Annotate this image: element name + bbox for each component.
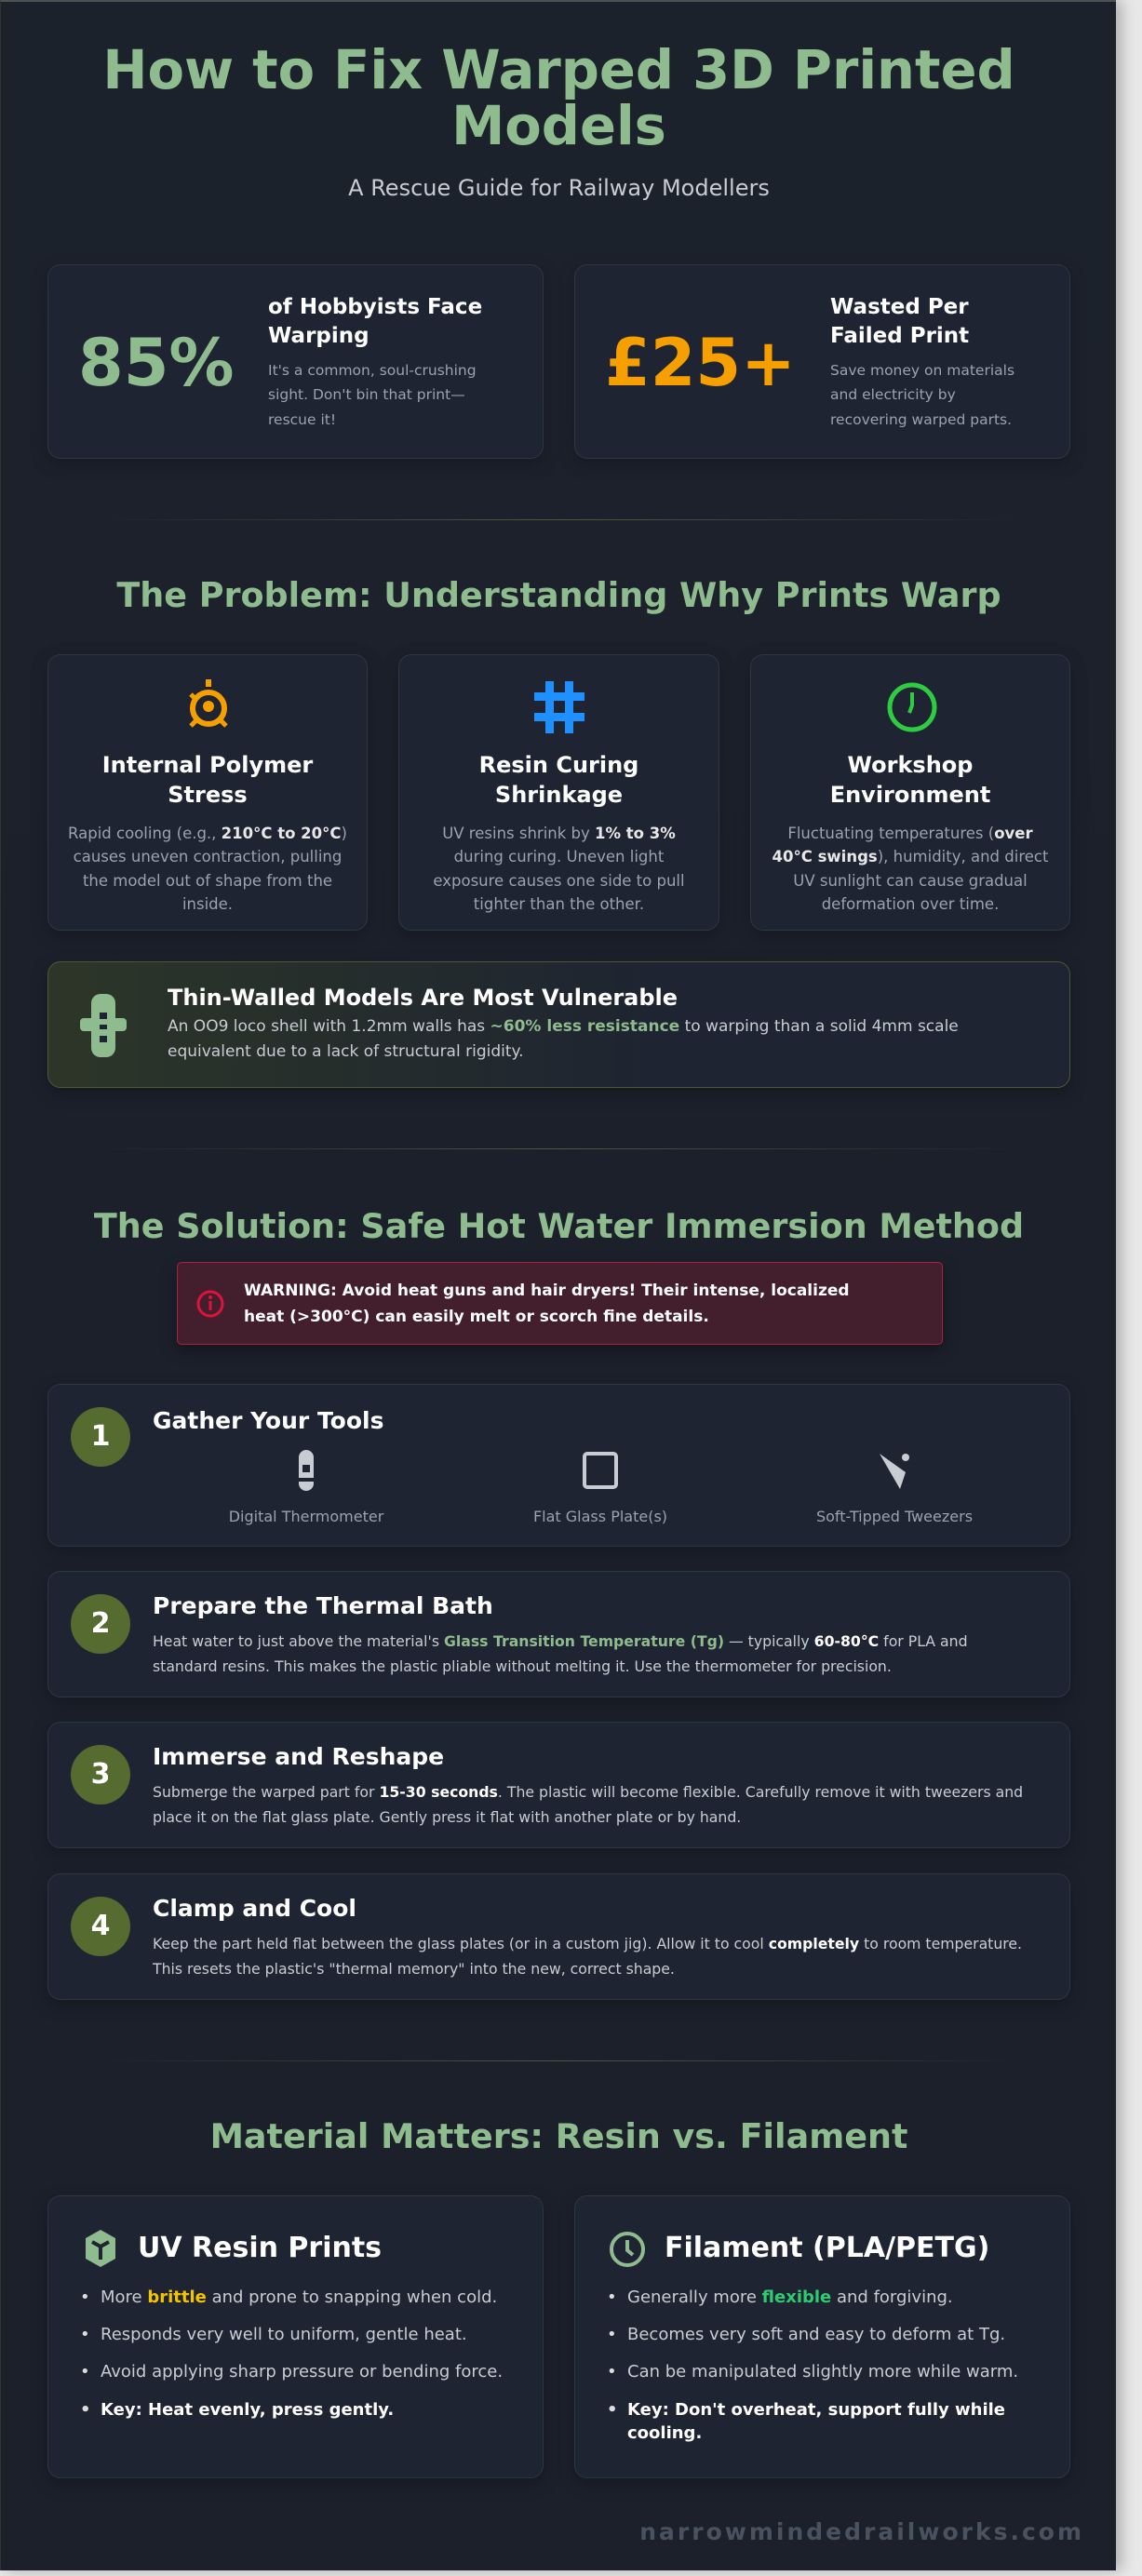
tool: glass plate [533, 1452, 667, 1525]
panel: resin shrinkage [398, 654, 719, 931]
icon: loco shell [80, 994, 127, 1057]
panel: workshop environment: Workshop Environment [830, 752, 990, 808]
panel: workshop environment: Fluctuating temperatures (over [787, 825, 1033, 842]
panel: UV resin: UV Resin Prints [138, 2232, 382, 2264]
stat card: 85% [47, 264, 544, 459]
panel: workshop environment [750, 654, 1070, 931]
icon: stress [189, 679, 228, 728]
step 4: This resets the plastic's "thermal memory" into the new, correct shape. [153, 1960, 675, 1978]
subtitle: A Rescue Guide for Railway Modellers [348, 175, 770, 201]
panel: polymer stress: Internal Polymer Stress [102, 752, 313, 808]
step 2: standard resins. This makes the plastic pliable without melting it. Use the thermometer for precision. [153, 1657, 892, 1675]
panel: polymer stress: Rapid cooling (e.g., 210°C to 20°C) causes uneven contraction, pulling the model out of shape from the inside. [68, 825, 347, 913]
stat number: £25+ [605, 325, 796, 401]
step 3: 3 [91, 1758, 110, 1791]
icon: clock [610, 2232, 645, 2267]
tool: glass plate: Flat Glass Plate(s) [533, 1508, 667, 1525]
icon: cube [86, 2230, 115, 2267]
icon: hash [534, 681, 584, 733]
step 4: Clamp and Cool [153, 1895, 356, 1922]
panel: UV resin: Avoid applying sharp pressure or bending force. [101, 2362, 503, 2381]
step 4: 4 [91, 1910, 110, 1942]
stat text: of Hobbyists Face Warping [268, 295, 482, 348]
panel: filament: Becomes very soft and easy to deform at Tg. [627, 2325, 1005, 2344]
title: How to Fix Warped 3D Printed [102, 39, 1015, 101]
panel: filament: Generally more flexible and forgiving. [627, 2288, 953, 2307]
panel: UV resin: More brittle and prone to snapping when cold. [101, 2288, 497, 2307]
step 4 [47, 1873, 1070, 2000]
step 1: Gather Your Tools [153, 1407, 383, 1434]
tool: thermometer: Digital Thermometer [229, 1508, 383, 1525]
callout: thin-walled [47, 961, 1070, 1088]
callout text: An OO9 loco shell with 1.2mm walls has ~60% less resistance to warping than a solid 4mm scale equivalent due to a lack of structural rigidity. [168, 1017, 959, 1061]
step 3 [47, 1722, 1070, 1848]
callout text: Thin-Walled Models Are Most Vulnerable [168, 985, 678, 1011]
step 3: Submerge the warped part for 15-30 seconds. The plastic will become flexible. Carefully remove it with tweezers and [153, 1783, 1023, 1801]
panel: UV resin [47, 2195, 544, 2478]
tool: tweezers [816, 1454, 973, 1525]
panel: filament: Can be manipulated slightly more while warm. [627, 2362, 1018, 2381]
heading: problem: The Problem: Understanding Why Prints Warp [116, 575, 1001, 615]
step 1 [47, 1384, 1070, 1547]
tool: tweezers: Soft-Tipped Tweezers [816, 1508, 973, 1525]
stat text: Wasted Per Failed Print [830, 295, 969, 348]
heading: materials: Material Matters: Resin vs. Filament [210, 2116, 907, 2156]
panel: filament: Filament (PLA/PETG) [665, 2232, 989, 2264]
stat card: £25+ [574, 264, 1070, 459]
step 2: 2 [91, 1607, 110, 1640]
step 1: 1 [91, 1420, 110, 1453]
panel: resin shrinkage: UV resins shrink by 1% to 3% during curing. Uneven light exposure causes one side to pull tighter than the other. [433, 825, 685, 913]
panel: UV resin: Key: Heat evenly, press gently. [101, 2400, 394, 2420]
panel: UV resin: Responds very well to uniform, gentle heat. [101, 2325, 467, 2344]
heading: solution: The Solution: Safe Hot Water Immersion Method [94, 1206, 1024, 1246]
icon: warning [197, 1290, 223, 1318]
panel: filament: Key: Don't overheat, support fully while cooling. [627, 2400, 1005, 2443]
step 4: Keep the part held flat between the glass plates (or in a custom jig). Allow it to cool completely to room temperature. [153, 1935, 1022, 1952]
title [102, 39, 1015, 157]
warning box: WARNING: Avoid heat guns and hair dryers! Their intense, localized heat (>300°C) can easily melt or scorch fine details. [244, 1281, 850, 1326]
title: Models [451, 95, 666, 157]
callout text [168, 985, 959, 1061]
panel: polymer stress [47, 654, 368, 931]
step 2 [47, 1571, 1070, 1697]
icon: gauge [888, 683, 936, 731]
warning box [177, 1262, 943, 1345]
stat text [830, 295, 1014, 428]
stat text: Save money on materials and electricity by recovering warped parts. [830, 362, 1014, 428]
step 3: place it on the flat glass plate. Gently press it flat with another plate or by hand. [153, 1808, 741, 1826]
footer: website: narrowmindedrailworks.com [639, 2518, 1084, 2545]
stat text [268, 295, 482, 428]
tool: thermometer [229, 1450, 383, 1525]
panel: workshop environment: UV sunlight can cause gradual deformation over time. [793, 872, 1028, 913]
step 2: Heat water to just above the material's Glass Transition Temperature (Tg) — typically 60-80°C for PLA and [153, 1632, 968, 1650]
step 3: Immerse and Reshape [153, 1743, 444, 1770]
step 2: Prepare the Thermal Bath [153, 1592, 493, 1619]
panel: workshop environment: 40°C swings), humidity, and direct [773, 848, 1048, 865]
stat number: 85% [78, 325, 235, 401]
panel: resin shrinkage: Resin Curing Shrinkage [479, 752, 638, 808]
stat text: It's a common, soul-crushing sight. Don't bin that print—rescue it! [268, 362, 477, 428]
panel: filament [574, 2195, 1070, 2478]
